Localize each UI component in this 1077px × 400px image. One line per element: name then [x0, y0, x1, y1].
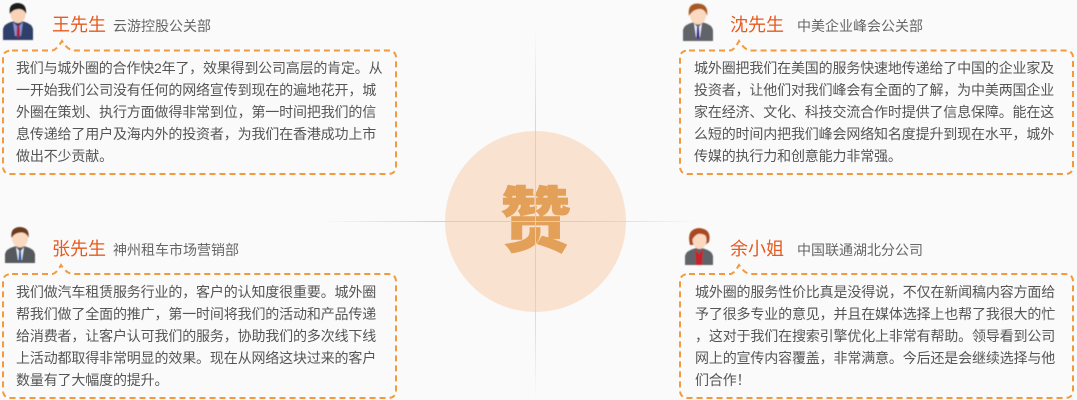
quote text: 上活动都取得非常明显的效果。现在从网络这块过来的客户: [16, 350, 376, 366]
quote text: 外圈在策划、执行方面做得非常到位，第一时间把我们的信: [16, 104, 376, 120]
quote text: 数量有了大幅度的提升。: [16, 372, 168, 388]
quote text: [694, 60, 1054, 164]
center badge: praise: 赞: [500, 183, 571, 262]
quote text: 么短的时间内把我们峰会网络知名度提升到现在水平，城外: [694, 126, 1054, 142]
speech bubble: [680, 265, 1073, 398]
quote text: 给消费者，让客户认可我们的服务，协助我们的多次线下线: [16, 328, 376, 344]
name: 沈先生: [730, 15, 784, 35]
quote text: 城外圈的服务性价比真是没得说，不仅在新闻稿内容方面给: [695, 284, 1055, 300]
icon: avatar Yu: [685, 228, 713, 265]
quote text: 家在经济、文化、科技交流合作时提供了信息保障。能在这: [694, 104, 1054, 120]
speech bubble: [680, 41, 1073, 174]
panel: testimonial Yu: [680, 228, 1073, 398]
name: 王先生: [52, 15, 106, 35]
quote text: 做出不少贡献。: [16, 148, 113, 164]
quote text: [16, 284, 376, 388]
quote text: 我们做汽车租赁服务行业的，客户的认知度很重要。城外圈: [16, 284, 376, 300]
quote text: 帮我们做了全面的推广，第一时间将我们的活动和产品传递: [16, 306, 376, 322]
quote text: 予了很多专业的意见，并且在媒体选择上也帮了我很大的忙: [695, 306, 1055, 322]
panel: testimonial Shen: [680, 4, 1073, 174]
role: 中国联通湖北分公司: [797, 242, 923, 258]
icon: avatar Shen: [683, 4, 713, 41]
speech bubble: [3, 41, 396, 174]
name: 张先生: [52, 239, 106, 259]
icon: avatar Wang: [3, 3, 33, 40]
speech bubble: [3, 265, 396, 398]
quote text: 投资者，让他们对我们峰会有全面的了解，为中美两国企业: [694, 82, 1054, 98]
quote text: [16, 60, 383, 164]
role: 中美企业峰会公关部: [797, 18, 923, 34]
role: 神州租车市场营销部: [113, 242, 239, 258]
center badge: praise: [320, 30, 700, 400]
quote text: 息传递给了用户及海内外的投资者，为我们在香港成功上市: [16, 126, 376, 142]
quote text: 我们与城外圈的合作快2年了，效果得到公司高层的肯定。从: [16, 60, 383, 76]
name: 余小姐: [730, 239, 784, 259]
quote text: 传媒的执行力和创意能力非常强。: [694, 148, 902, 164]
panel: testimonial Wang: [3, 3, 396, 174]
icon: avatar Zhang: [5, 227, 35, 263]
role: 云游控股公关部: [113, 18, 211, 34]
quote text: 一开始我们公司没有任何的网络宣传到现在的遍地花开，城: [16, 82, 376, 98]
quote text: 们合作！: [695, 372, 750, 388]
quote text: ，这对于我们在搜索引擎优化上非常有帮助。领导看到公司: [695, 328, 1055, 344]
quote text: 网上的宣传内容覆盖，非常满意。今后还是会继续选择与他: [695, 350, 1055, 366]
panel: testimonial Zhang: [3, 227, 396, 398]
quote text: 城外圈把我们在美国的服务快速地传递给了中国的企业家及: [694, 60, 1054, 76]
quote text: [695, 284, 1055, 388]
